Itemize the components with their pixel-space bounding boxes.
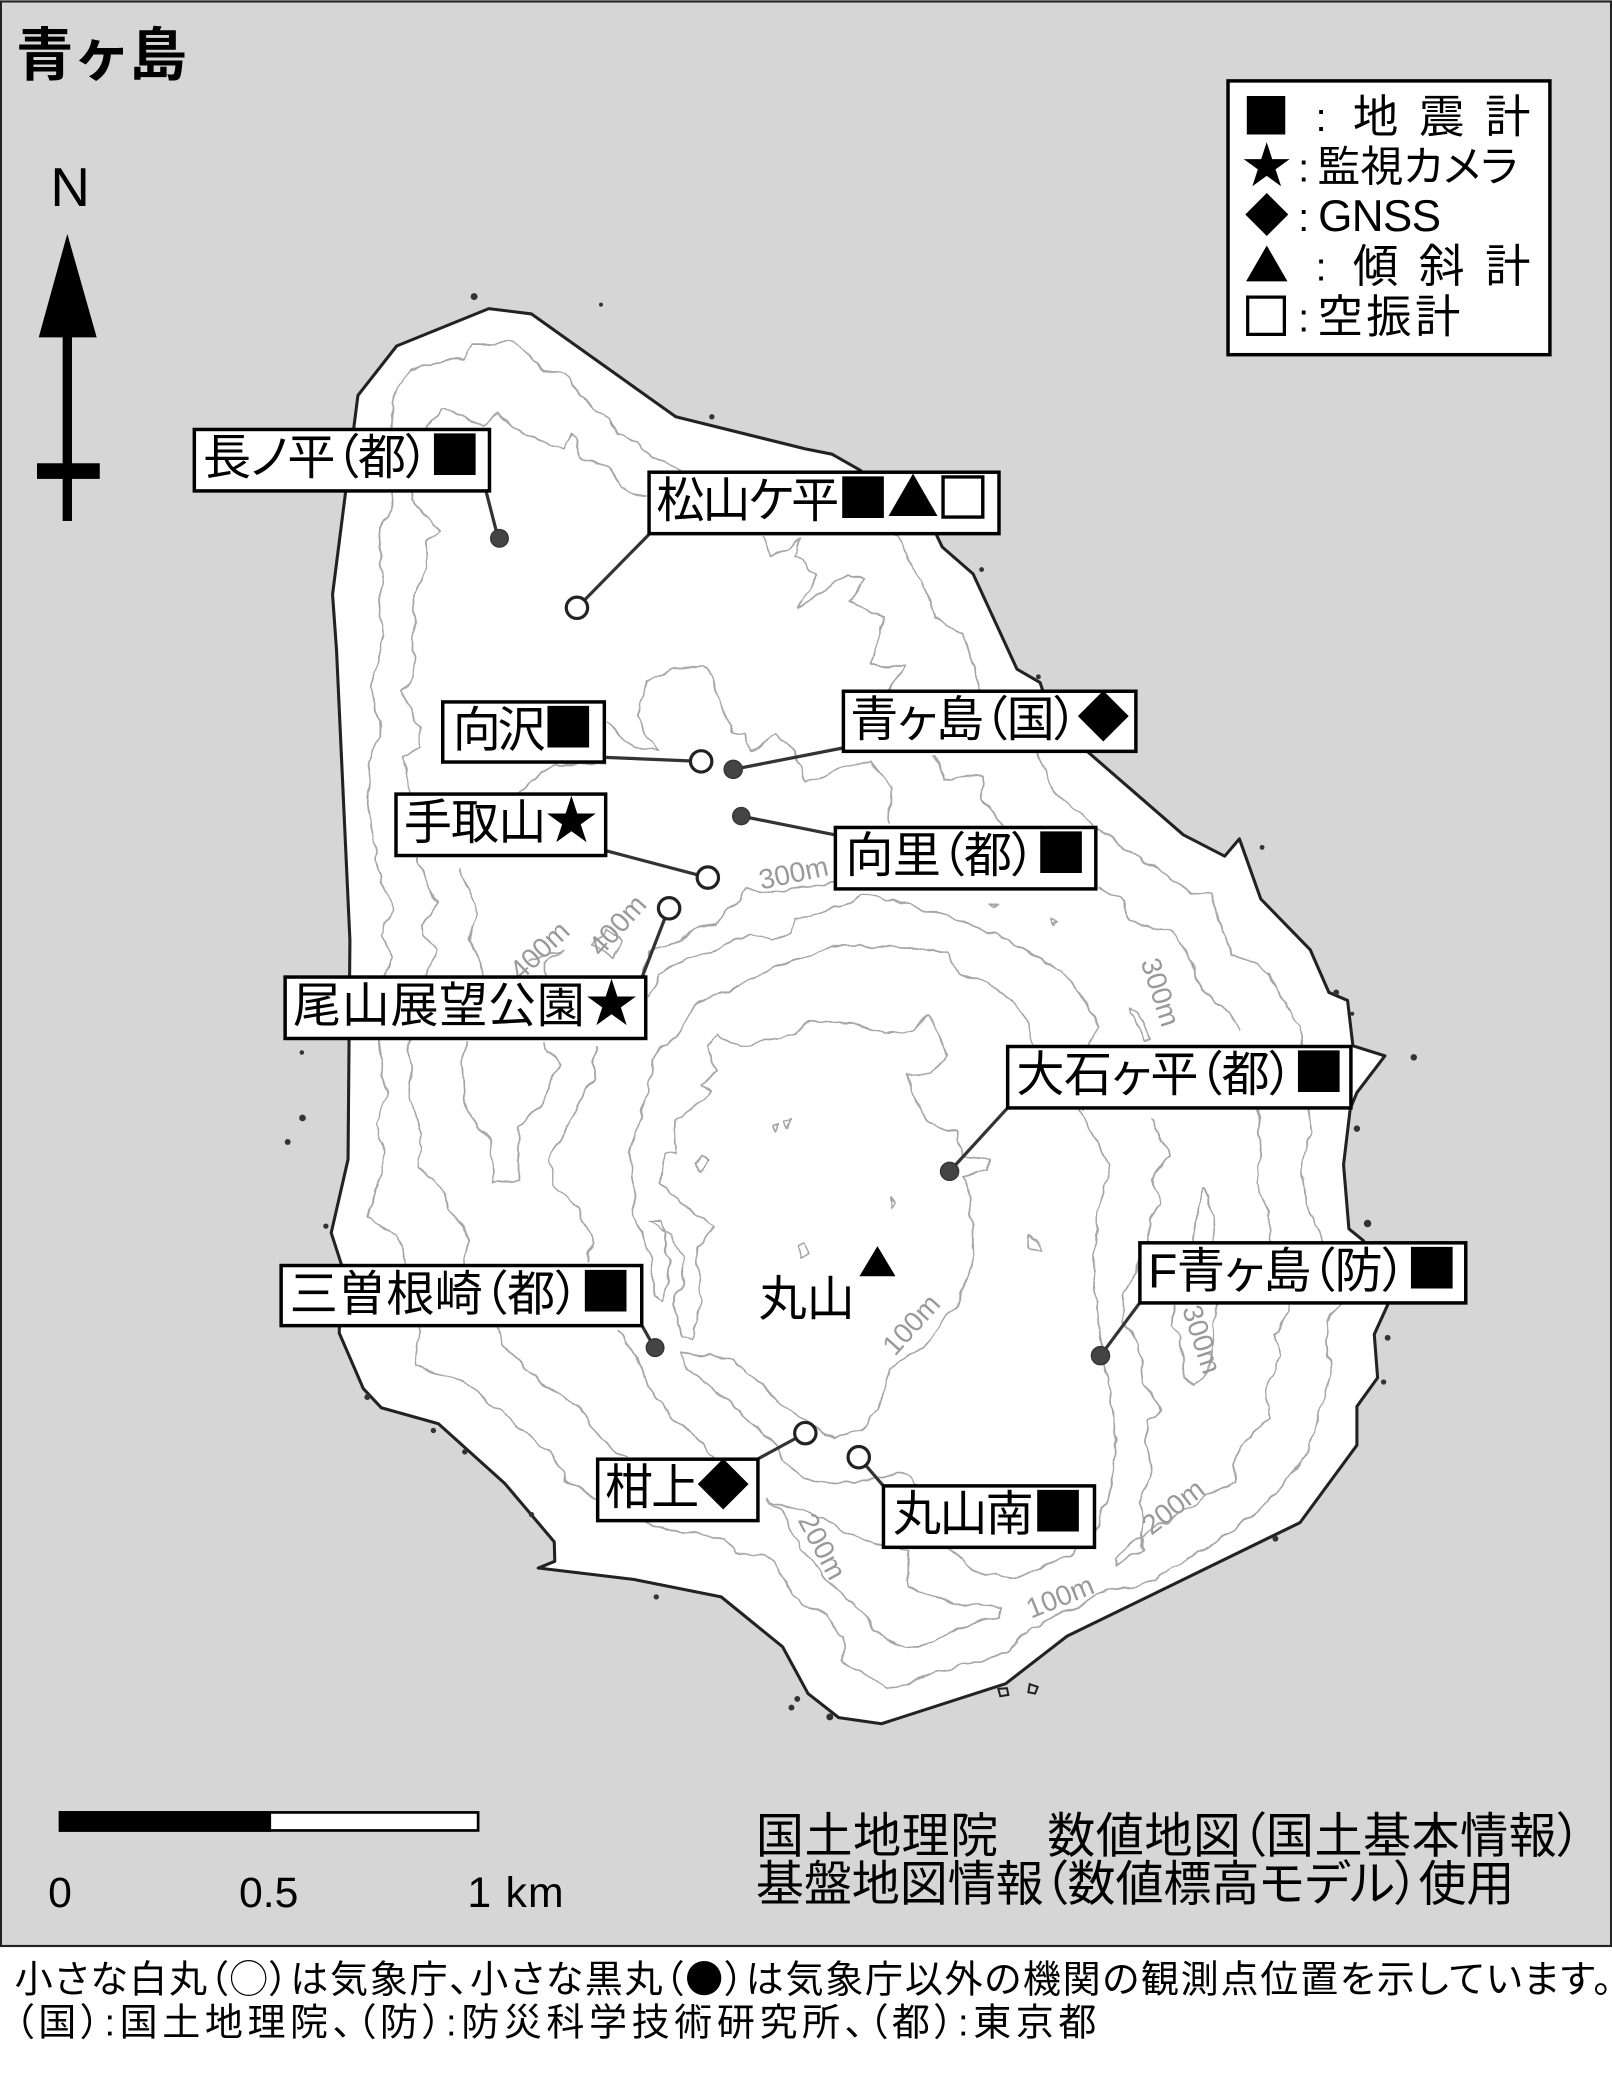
footnote [15, 1949, 1612, 2044]
station: Osanotaira [194, 414, 508, 547]
station: Kojiue: 柑上◆ [605, 1444, 749, 1519]
station: Tedoriyama: 手取山★ [404, 779, 598, 854]
contour elevation labels: 300m [1135, 954, 1186, 1030]
contour lines [368, 342, 1341, 1690]
station: F-Aogashima [1091, 1228, 1466, 1365]
station: Maruyama tiltmeter [759, 1246, 895, 1327]
legend row: seismometer: : [1316, 96, 1327, 140]
north label: N [50, 156, 90, 218]
legend row: seismometer: ■ [1242, 78, 1290, 148]
station: Oyama observation park: 尾山展望公園★ [293, 962, 638, 1037]
legend row: camera: : [1298, 147, 1309, 191]
legend row: GNSS [1245, 180, 1441, 244]
scale bar: 1 km [467, 1869, 564, 1917]
scale bar: 0.5 [239, 1869, 298, 1917]
station: Misonezaki: 三曽根崎（都）■ [290, 1250, 632, 1325]
legend row: tiltmeter: : [1316, 246, 1327, 290]
contour elevation labels: 200m [792, 1508, 852, 1585]
map source attribution: 国土地理院 数値地図（国土基本情報） [756, 1809, 1581, 1863]
station: Osanotaira: 長ノ平（都）■ [203, 414, 481, 489]
icon: north arrow [37, 234, 100, 521]
station: Oishigadaira: 大石ヶ平（都）■ [1016, 1031, 1345, 1106]
offshore rocks [285, 293, 1417, 1720]
legend row: GNSS: : [1298, 196, 1309, 240]
contour elevation labels [503, 851, 1227, 1624]
footnote: （国）:国土地理院、（防）:防災科学技術研究所、（都）:東京都 [15, 2002, 1096, 2044]
legend row: camera [1242, 127, 1518, 198]
legend row: tiltmeter: 傾 斜 計 [1353, 241, 1531, 292]
station: Tedoriyama [396, 779, 719, 888]
legend row: tiltmeter: ▲ [1245, 231, 1289, 295]
station: Kojiue [598, 1422, 816, 1521]
station: Maruyama south [848, 1446, 1094, 1547]
map source attribution: 基盤地図情報（数値標高モデル）使用 [756, 1858, 1515, 1912]
legend [1228, 78, 1550, 355]
station: Maruyama south: 丸山南■ [893, 1471, 1084, 1546]
contour elevation labels: 200m [1136, 1473, 1210, 1541]
title: 青ヶ島 [16, 8, 187, 92]
station: Mukouzato [733, 808, 1096, 889]
station: F-Aogashima: F青ヶ島（防）■ [1148, 1228, 1458, 1303]
station: Mukaizawa: 向沢■ [453, 687, 594, 762]
contour elevation labels: 300m [1176, 1301, 1227, 1377]
contour elevation labels: 400m [503, 915, 575, 986]
legend row: GNSS: ◆ [1245, 180, 1289, 244]
island coastline [331, 309, 1388, 1724]
scale bar [48, 1811, 564, 1917]
legend row: infrasound: 空振計 [1318, 292, 1460, 343]
legend row: infrasound: : [1298, 296, 1309, 340]
legend row: infrasound [1242, 278, 1460, 348]
map: island of Aogashima [285, 293, 1417, 1724]
contour elevation labels: 300m [756, 851, 831, 895]
station: Oishigadaira [940, 1031, 1351, 1180]
legend row: seismometer: 地 震 計 [1353, 91, 1531, 142]
legend row: camera: ★ [1242, 127, 1291, 198]
station: Mukouzato: 向里（都）■ [845, 812, 1087, 887]
station: Matsuyamagadaira [566, 457, 999, 618]
contour elevation labels: 100m [876, 1288, 946, 1361]
legend row: GNSS: GNSS [1318, 192, 1441, 241]
scale bar: 0 [48, 1869, 72, 1917]
legend row: infrasound: □ [1242, 278, 1290, 348]
station: Misonezaki [281, 1250, 664, 1356]
contour elevation labels: 100m [1022, 1569, 1098, 1624]
map source attribution [756, 1810, 1581, 1912]
legend row: tiltmeter [1245, 231, 1531, 295]
station: Oyama observation park [285, 898, 680, 1038]
station: Mukaizawa [443, 687, 712, 772]
station: Aogashima GSI [724, 676, 1136, 778]
station: Matsuyamagadaira: 松山ケ平■▲□ [656, 457, 989, 532]
contour elevation labels: 400m [582, 889, 652, 962]
station: Aogashima GSI: 青ヶ島（国）◆ [850, 676, 1129, 751]
footnote: 小さな白丸（◯）は気象庁、小さな黒丸（●）は気象庁以外の機関の観測点位置を示しています。 [15, 1949, 1612, 2004]
legend row: seismometer [1242, 78, 1531, 148]
station: Maruyama tiltmeter: 丸山 [759, 1273, 855, 1327]
legend row: camera: 監視カメラ [1318, 144, 1518, 192]
